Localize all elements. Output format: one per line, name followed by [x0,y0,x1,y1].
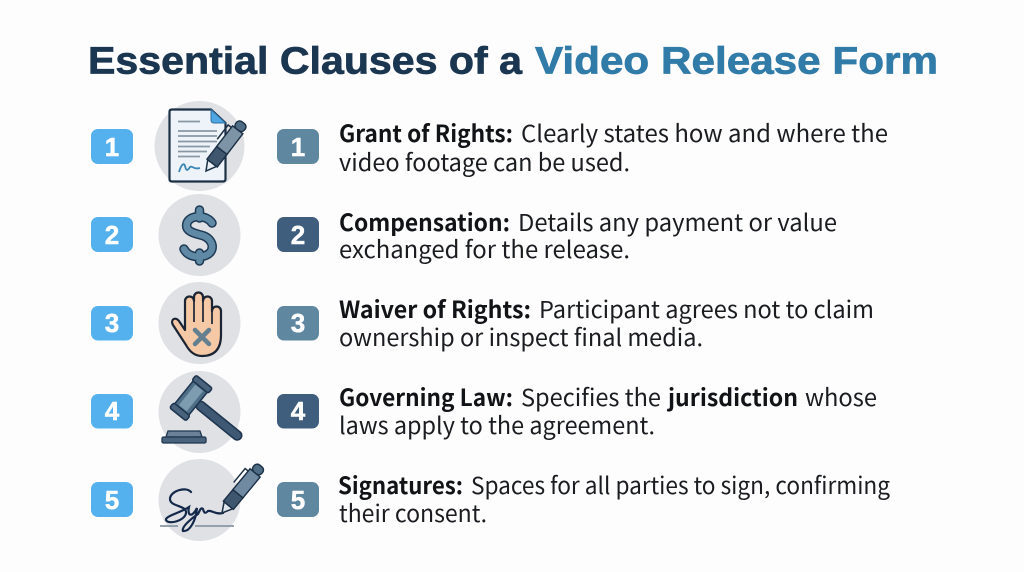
text: compensation: Compensation: [339,204,510,238]
left number badge 3: 3 [105,308,119,338]
icon: gavel [158,371,254,455]
right number badge 2: 2 [291,220,305,250]
text: governing law: whose [805,379,877,413]
title: Video Release Form [535,40,938,82]
text: waiver of rights: Waiver of Rights: [339,291,531,325]
right number badge 3: 3 [291,308,305,338]
text: governing law: jurisdiction [666,379,798,413]
left number badge 1 [91,129,133,164]
text: grant of rights [339,115,888,178]
right number badge 1 [277,129,319,164]
text: governing law: Governing Law: [339,379,513,413]
icon: signature and pen [158,459,266,541]
text: compensation: exchanged for the release. [339,231,630,265]
icon: raised hand with cross [158,282,240,364]
text: waiver of rights: ownership or inspect final media. [339,319,703,353]
left number badge 2: 2 [105,220,119,250]
right number badge 3 [277,306,319,340]
left number badge 5: 5 [105,485,119,515]
row 1: grant of rights [91,101,888,191]
title: Essential Clauses of a [88,40,523,82]
left number badge 3 [91,306,133,340]
text: waiver of rights [339,291,874,353]
text: compensation [339,204,837,265]
row 2: compensation [91,194,837,276]
right number badge 4: 4 [291,396,306,426]
title [88,40,938,82]
left number badge 1: 1 [105,132,119,162]
text: grant of rights: video footage can be used. [339,144,630,178]
text: governing law: Specifies the [521,379,661,413]
right number badge 5 [277,482,319,517]
row 4: governing law [91,371,877,455]
left number badge 2 [91,217,133,252]
text: grant of rights: Grant of Rights: [339,115,513,149]
row 3: waiver of rights [91,282,874,364]
text: signatures [338,467,890,529]
text: compensation: Details any payment or value [518,204,837,238]
text: governing law: laws apply to the agreement. [339,407,655,441]
text: waiver of rights: Participant agrees not to claim [539,291,874,325]
row 5: signatures [91,459,890,541]
text: governing law [339,379,877,441]
icon: document and pen [154,101,248,191]
right number badge 5: 5 [291,485,305,515]
icon: dollar sign [158,194,240,276]
text: signatures: Signatures: [338,467,463,501]
right number badge 2 [277,217,319,252]
text: grant of rights: Clearly states how and where the [521,115,888,149]
text: signatures: Spaces for all parties to sign, confirming [471,467,890,501]
left number badge 4 [91,394,133,428]
right number badge 1: 1 [291,132,305,162]
text: signatures: their consent. [339,495,487,529]
left number badge 5 [91,482,133,517]
left number badge 4: 4 [105,396,120,426]
right number badge 4 [277,394,319,428]
